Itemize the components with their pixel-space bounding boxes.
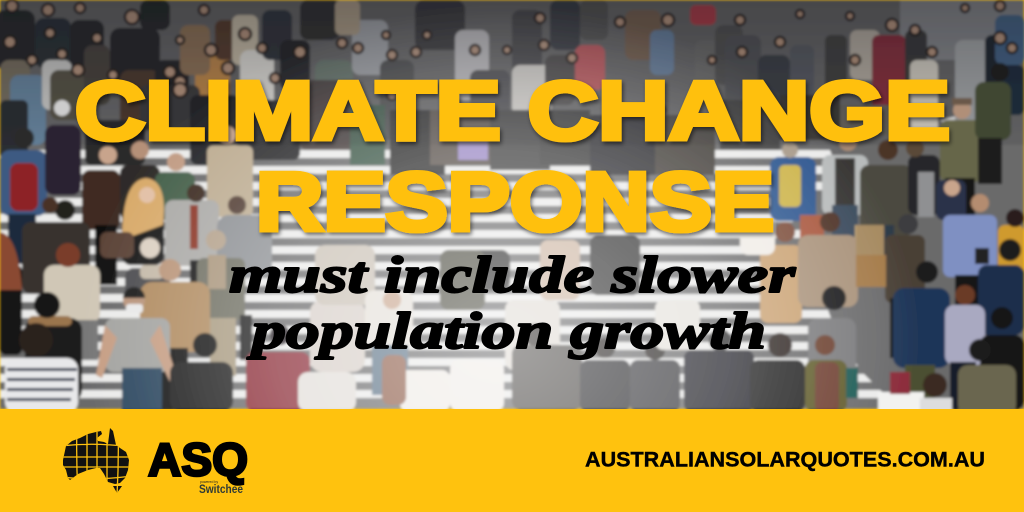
title: climate change response: RESPONSE <box>256 155 774 248</box>
white haze over the centre of the photo <box>98 19 905 409</box>
title: climate change response: CLIMATE CHANGE <box>75 64 950 157</box>
logo text: powered by Switchee: Switchee <box>199 484 243 496</box>
subtitle <box>229 247 796 360</box>
logo text: powered by Switchee <box>199 480 243 496</box>
logo text: powered by Switchee: powered by <box>200 480 218 484</box>
foreground centre and right figures <box>505 63 1024 415</box>
foreground left figures <box>0 100 510 413</box>
darker tone over the dense upper crowd <box>0 0 1024 145</box>
icon: Australia map with solar grid <box>63 428 129 493</box>
subtitle: must include slower <box>229 247 796 304</box>
title: climate change response <box>75 64 950 248</box>
footer band <box>0 409 1024 512</box>
website url: AUSTRALIANSOLARQUOTES.COM.AU <box>585 448 985 472</box>
subtitle: population growth <box>247 303 766 360</box>
logo text: ASQ: ASQ <box>148 434 248 486</box>
